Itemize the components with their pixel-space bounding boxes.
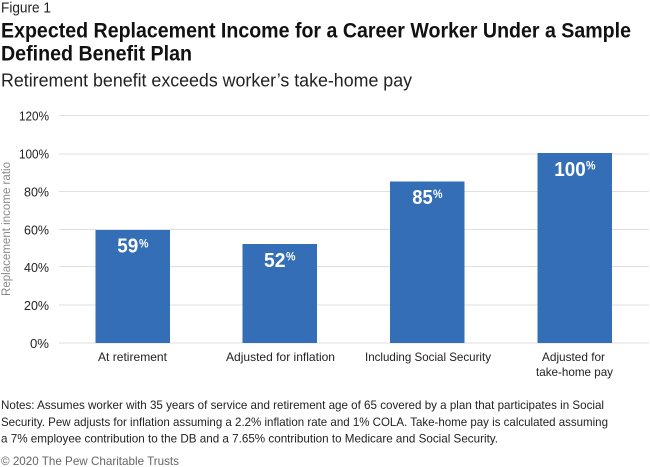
category labels: take-home pay	[536, 365, 613, 379]
title	[1, 20, 631, 66]
category labels	[98, 350, 613, 379]
notes	[1, 398, 608, 446]
y axis tick labels: 100%	[19, 146, 49, 162]
title: Defined Benefit Plan	[1, 42, 192, 66]
figure label: Figure 1	[1, 0, 51, 16]
y axis tick labels: 60%	[24, 222, 49, 238]
y axis title: Replacement income ratio	[1, 162, 13, 296]
bar: adjusted for inflation: 52	[264, 250, 286, 272]
y axis tick labels: 0%	[30, 336, 49, 351]
bar: at retirement: 59	[117, 236, 138, 258]
bar: adjusted for take-home pay: 100	[554, 159, 586, 181]
bar chart	[1, 108, 649, 379]
bar: adjusted for take-home pay: %	[586, 160, 596, 172]
y axis tick labels	[19, 108, 49, 351]
y axis tick labels: 40%	[24, 260, 49, 275]
bar: adjusted for inflation	[242, 244, 317, 343]
category labels: Adjusted for	[542, 350, 605, 364]
notes: Notes: Assumes worker with 35 years of service and retirement age of 65 covered by a plan that participates in Social	[1, 398, 604, 412]
notes: Security. Pew adjusts for inflation assuming a 2.2% inflation rate and 1% COLA. Take-home pay is calculated assuming	[1, 415, 608, 429]
subtitle: Retirement benefit exceeds worker’s take-home pay	[1, 70, 412, 90]
category labels: At retirement	[98, 350, 168, 364]
bar: at retirement	[96, 230, 170, 343]
bar: adjusted for inflation: %	[286, 252, 296, 264]
notes: a 7% employee contribution to the DB and a 7.65% contribution to Medicare and Social Security.	[1, 432, 498, 446]
bar: at retirement: %	[139, 239, 148, 251]
y axis tick labels: 120%	[19, 108, 49, 124]
y axis tick labels: 20%	[24, 298, 49, 313]
bar: including social security: 85	[412, 187, 433, 209]
bar: including social security	[390, 182, 464, 343]
bar: including social security: %	[433, 189, 442, 201]
category labels: Including Social Security	[365, 350, 491, 364]
bar: adjusted for take-home pay	[538, 153, 612, 343]
y axis tick labels: 80%	[24, 184, 49, 200]
category labels: Adjusted for inflation	[226, 350, 335, 364]
